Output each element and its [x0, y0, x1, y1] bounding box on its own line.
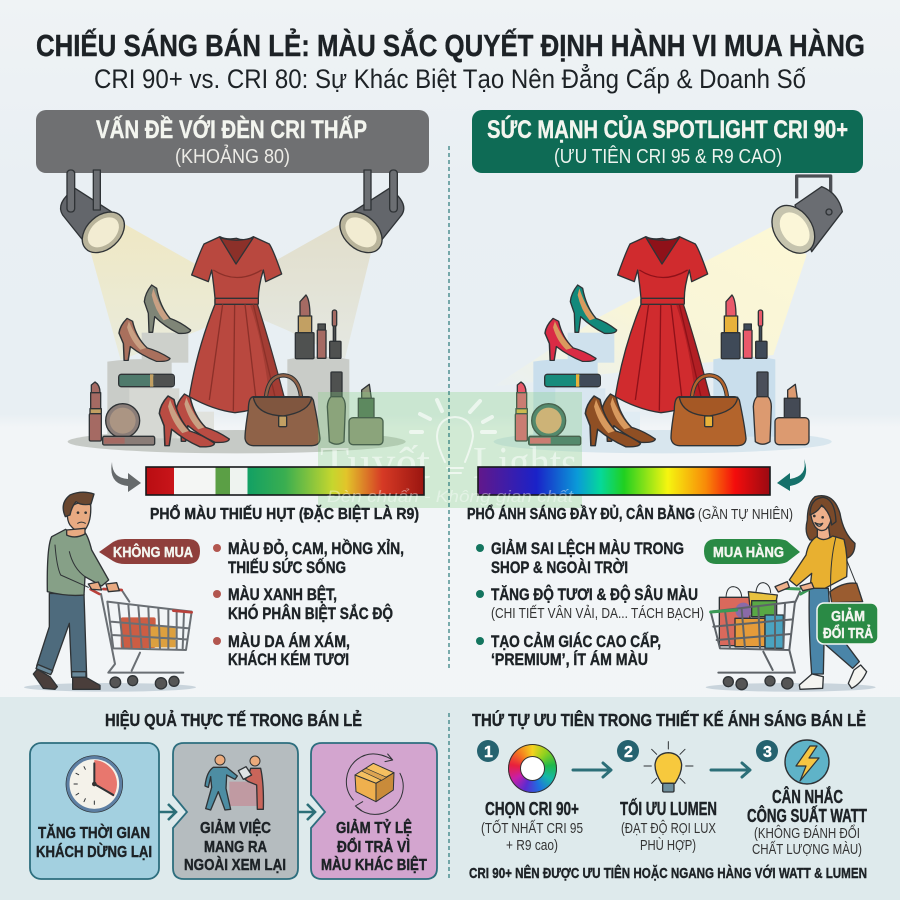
panel heading: low CRI: (KHOẢNG 80) — [175, 145, 290, 168]
sweater — [789, 536, 847, 588]
bullet 3: KHÁCH KÉM TƯƠI — [228, 650, 349, 669]
card: fewer outside checks: MANG RA — [204, 839, 267, 856]
shoe brown — [119, 318, 170, 361]
card: time: TĂNG THỜI GIAN — [38, 823, 150, 842]
light beams — [90, 223, 372, 360]
eyeshadow tube — [119, 374, 174, 387]
card: time: KHÁCH DỪNG LẠI — [36, 842, 152, 861]
icon: light bulb — [644, 742, 693, 792]
tag: fewer returns: GIẢM — [831, 608, 865, 625]
badge 2 — [617, 740, 639, 762]
shopping bags — [719, 597, 750, 646]
shoe red — [545, 318, 596, 361]
spotlight CRI 90+ — [763, 176, 842, 261]
spotlight right — [332, 170, 404, 261]
bullet 1 — [213, 539, 404, 577]
icon: clock — [66, 756, 123, 812]
bullet 1 — [476, 539, 684, 577]
pedestals — [533, 333, 775, 438]
legs — [37, 593, 87, 677]
icon: power bolt — [785, 740, 829, 784]
tag: buying — [704, 539, 800, 564]
lipstick on pedestal — [721, 295, 740, 359]
jeans — [809, 588, 859, 674]
arrow 1 — [159, 804, 176, 820]
dress — [189, 237, 284, 413]
panel heading: low CRI — [36, 110, 429, 173]
bullet 3: ‘PREMIUM’, ÍT ÁM MÀU — [491, 650, 648, 669]
shoe teal — [570, 285, 617, 333]
icon: colour wheel — [508, 744, 557, 793]
tag: fewer returns: ĐỔI TRẢ — [823, 624, 873, 642]
lipstick small — [89, 382, 101, 441]
neck — [817, 525, 830, 540]
customer not buying — [24, 492, 196, 692]
bullet 2: (CHI TIẾT VÂN VẢI, DA... TÁCH BẠCH) — [491, 605, 704, 622]
card: fewer returns: MÀU KHÁC BIỆT — [321, 855, 427, 874]
brush — [529, 436, 581, 445]
step 1 text: CHỌN CRI 90+ — [485, 799, 579, 819]
arrow step 1 to 2 — [573, 763, 611, 777]
lipstick small — [515, 382, 527, 441]
full spectrum bar — [478, 467, 770, 495]
low CRI spectrum bar — [146, 467, 424, 495]
floor shadow — [494, 430, 832, 453]
card: fewer returns: GIẢM TỶ LỆ — [336, 818, 412, 837]
spectrum caption full: PHỔ ÁNH SÁNG ĐẦY ĐỦ, CÂN BẰNG — [467, 505, 695, 523]
watermark: Tuyết — [320, 437, 430, 488]
badge 3: 3 — [763, 744, 772, 761]
card: fewer returns — [311, 743, 437, 879]
spectrum caption low: PHỔ MÀU THIẾU HỤT (ĐẶC BIỆT LÀ R9) — [150, 505, 419, 523]
compact powder — [106, 404, 140, 438]
bullet 2: MÀU XANH BỆT, — [228, 585, 337, 604]
card: fewer outside checks: GIẢM VIỆC — [200, 818, 271, 837]
curved arrow to full spectrum — [777, 459, 806, 491]
step 3 text — [747, 786, 867, 858]
foundation bottle — [753, 372, 771, 444]
dress — [615, 237, 710, 413]
foundation bottle — [327, 372, 345, 444]
nail polish — [349, 384, 383, 445]
tag: not buying: KHÔNG MUA — [113, 543, 193, 561]
watermark tagline: Đèn chuẩn - Không gian chất — [327, 487, 574, 506]
lip gloss — [317, 324, 326, 358]
step 3 text: CHẤT LƯỢNG MÀU) — [752, 841, 862, 858]
tag: buying: MUA HÀNG — [713, 544, 784, 561]
icon: return box — [346, 754, 403, 814]
step 3 text: CÂN NHẮC — [772, 786, 843, 807]
curved arrow to low spectrum — [111, 462, 141, 492]
badge 1 — [477, 740, 499, 762]
bullet 1: THIẾU SỨC SỐNG — [228, 557, 346, 577]
icon: customer and clerk — [205, 755, 263, 810]
bullet 1: MÀU ĐỎ, CAM, HỒNG XỈN, — [228, 539, 404, 558]
bullet 2: KHÓ PHÂN BIỆT SẮC ĐỘ — [228, 604, 393, 623]
shoes — [799, 665, 867, 689]
customer buying — [706, 496, 876, 692]
step 2 text: (ĐẠT ĐỘ RỌI LUX — [621, 820, 716, 837]
step 3 text: (KHÔNG ĐÁNH ĐỔI — [754, 824, 860, 842]
nail polish — [775, 384, 809, 445]
step 2 text — [620, 798, 717, 854]
panel heading: CRI 90+ — [472, 110, 863, 173]
subtitle: CRI 90+ vs. CRI 80: Sự Khác Biệt Tạo Nên Đẳng Cấp & Doanh Số — [94, 62, 806, 94]
spotlight left — [61, 170, 132, 261]
step 2 text: TỐI ƯU LUMEN — [620, 798, 717, 819]
brown shoes — [585, 394, 655, 447]
card: fewer outside checks: NGOÀI XEM LẠI — [184, 855, 286, 874]
brush — [103, 436, 155, 445]
lip wand — [756, 310, 767, 358]
badge 3 — [756, 740, 778, 762]
spectrum caption full: (GẦN TỰ NHIÊN) — [698, 506, 793, 523]
bullet 2 — [476, 585, 704, 622]
shoes — [33, 669, 100, 689]
compact powder — [532, 404, 566, 438]
basket goods — [121, 617, 156, 648]
tag: not buying — [99, 539, 200, 564]
pedestals — [107, 333, 349, 438]
badge 1: 1 — [484, 744, 493, 761]
red shoes — [159, 394, 229, 447]
tag: fewer returns — [817, 603, 878, 644]
bottom band — [0, 697, 900, 900]
watermark — [318, 392, 582, 508]
lip wand — [330, 310, 341, 358]
lip gloss — [743, 324, 752, 358]
bullet 3 — [213, 632, 350, 669]
eyeshadow tube — [545, 374, 600, 387]
card: fewer returns: ĐỔI TRẢ VÌ — [337, 837, 410, 856]
arrow 2 — [298, 804, 315, 820]
scene: CRI 90+ retail display — [493, 227, 832, 453]
face — [811, 506, 832, 531]
step 1 text — [481, 799, 583, 854]
step 1 text: (TỐT NHẤT CRI 95 — [481, 819, 583, 837]
lipstick on pedestal — [295, 295, 314, 359]
panel heading: CRI 90+: (ƯU TIÊN CRI 95 & R9 CAO) — [554, 145, 782, 168]
step 2 text: PHÙ HỢP) — [640, 837, 696, 854]
card: fewer outside checks — [173, 743, 298, 879]
section heading: real effect: HIỆU QUẢ THỰC TẾ TRONG BÁN LẺ — [105, 709, 362, 730]
bullet 2: TĂNG ĐỘ TƯƠI & ĐỘ SÂU MÀU — [491, 585, 698, 604]
bullet 3: MÀU DA ÁM XÁM, — [228, 632, 350, 651]
hair back — [806, 496, 855, 558]
sweater — [47, 529, 109, 595]
floor shadow — [68, 430, 406, 453]
step 1 text: + R9 cao) — [506, 837, 558, 854]
scene: low CRI retail display — [61, 170, 406, 453]
bullet 3: TẠO CẢM GIÁC CAO CẤP, — [491, 632, 661, 651]
bullet 1: SHOP & NGOÀI TRỜI — [491, 558, 628, 577]
light beam — [493, 227, 807, 387]
benefits list — [476, 539, 704, 669]
handbag — [245, 375, 320, 446]
problem list — [213, 539, 404, 669]
card: time — [30, 743, 159, 879]
cart — [711, 592, 800, 673]
panel heading: low CRI: VẤN ĐỀ VỚI ĐÈN CRI THẤP — [96, 114, 367, 144]
flow of effects — [30, 743, 437, 879]
watermark: Lights — [473, 437, 577, 488]
bullet 1: GIẢM SAI LỆCH MÀU TRONG — [491, 539, 684, 558]
head — [67, 503, 91, 532]
bullet 3 — [476, 632, 661, 669]
shoulder bag — [831, 537, 860, 593]
handbag — [671, 375, 746, 446]
bullet 2 — [213, 585, 393, 623]
cart — [101, 590, 192, 673]
arrow step 2 to 3 — [711, 763, 750, 777]
shoe grey — [144, 285, 191, 333]
badge 2: 2 — [624, 744, 633, 761]
